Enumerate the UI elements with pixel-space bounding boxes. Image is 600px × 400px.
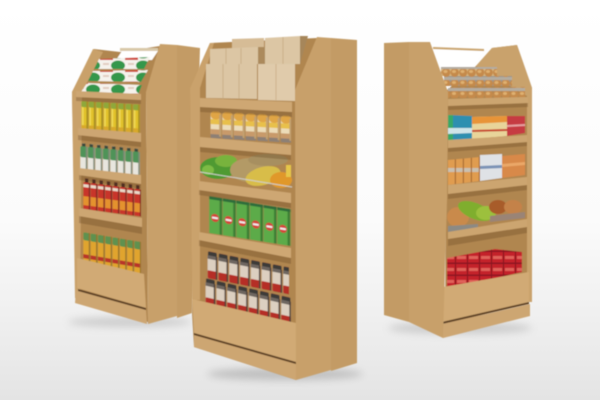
left unit top rail (120, 48, 158, 51)
shelf row: bread and greens (447, 197, 525, 232)
right unit shelf lips (448, 97, 528, 239)
shelf row: sauce jars (210, 111, 291, 143)
right unit toe gap (442, 302, 529, 324)
right unit plinth (442, 304, 530, 338)
left unit under-shelf shadows (76, 97, 142, 234)
shelf row: greens and bread (200, 154, 292, 189)
right unit wide side panel (409, 42, 448, 338)
right unit back and frame (445, 45, 532, 325)
shelf row: preserve jars back (207, 251, 289, 294)
left shelf unit (72, 44, 200, 324)
middle unit rear side panel (331, 38, 357, 371)
shelf row: green and yellow bottles (83, 232, 141, 275)
right unit base panel (442, 272, 529, 322)
middle unit back and frame (190, 38, 317, 380)
middle unit base panel (192, 299, 296, 363)
middle unit plinth (194, 335, 296, 380)
top shelf products: baked goods (441, 67, 525, 98)
right unit top rail (433, 47, 484, 51)
left unit toe gap (78, 289, 146, 310)
left unit base panel (77, 258, 146, 308)
left unit plinth (75, 290, 147, 324)
left unit back and frame (72, 46, 160, 322)
middle unit toe gap (194, 333, 296, 364)
shelf row: preserve jars front (205, 278, 291, 323)
left unit shelf lips (76, 91, 142, 227)
shelf row: cartons (448, 115, 525, 141)
right unit under-shelf shadows (448, 103, 528, 246)
left unit rear side panel (177, 45, 200, 318)
cardboard boxes on top (206, 36, 308, 101)
shelf row: red boxes (447, 249, 522, 289)
left unit sky gap under rail (116, 51, 158, 60)
middle unit shelf lips (199, 98, 292, 258)
shelf row: yellow cans (81, 101, 140, 135)
middle unit front side panel (295, 37, 331, 380)
right unit sky gap under rail (434, 50, 483, 66)
shelf row: green and white bottles (80, 143, 140, 175)
top shelf products: packets (81, 57, 150, 95)
shelf row: green bags (209, 196, 291, 246)
middle shelf unit (190, 36, 357, 380)
right shelf unit (384, 42, 532, 338)
middle unit left strut (190, 43, 214, 300)
right unit rear narrow panel (384, 42, 409, 322)
middle unit under-shelf shadows (199, 107, 292, 264)
shelf row: red and orange bottles (83, 178, 141, 217)
left unit front side panel (146, 44, 177, 324)
left unit left frame strut (72, 49, 103, 300)
right unit right strut (476, 45, 532, 302)
shelf row: packaged goods (448, 154, 525, 185)
